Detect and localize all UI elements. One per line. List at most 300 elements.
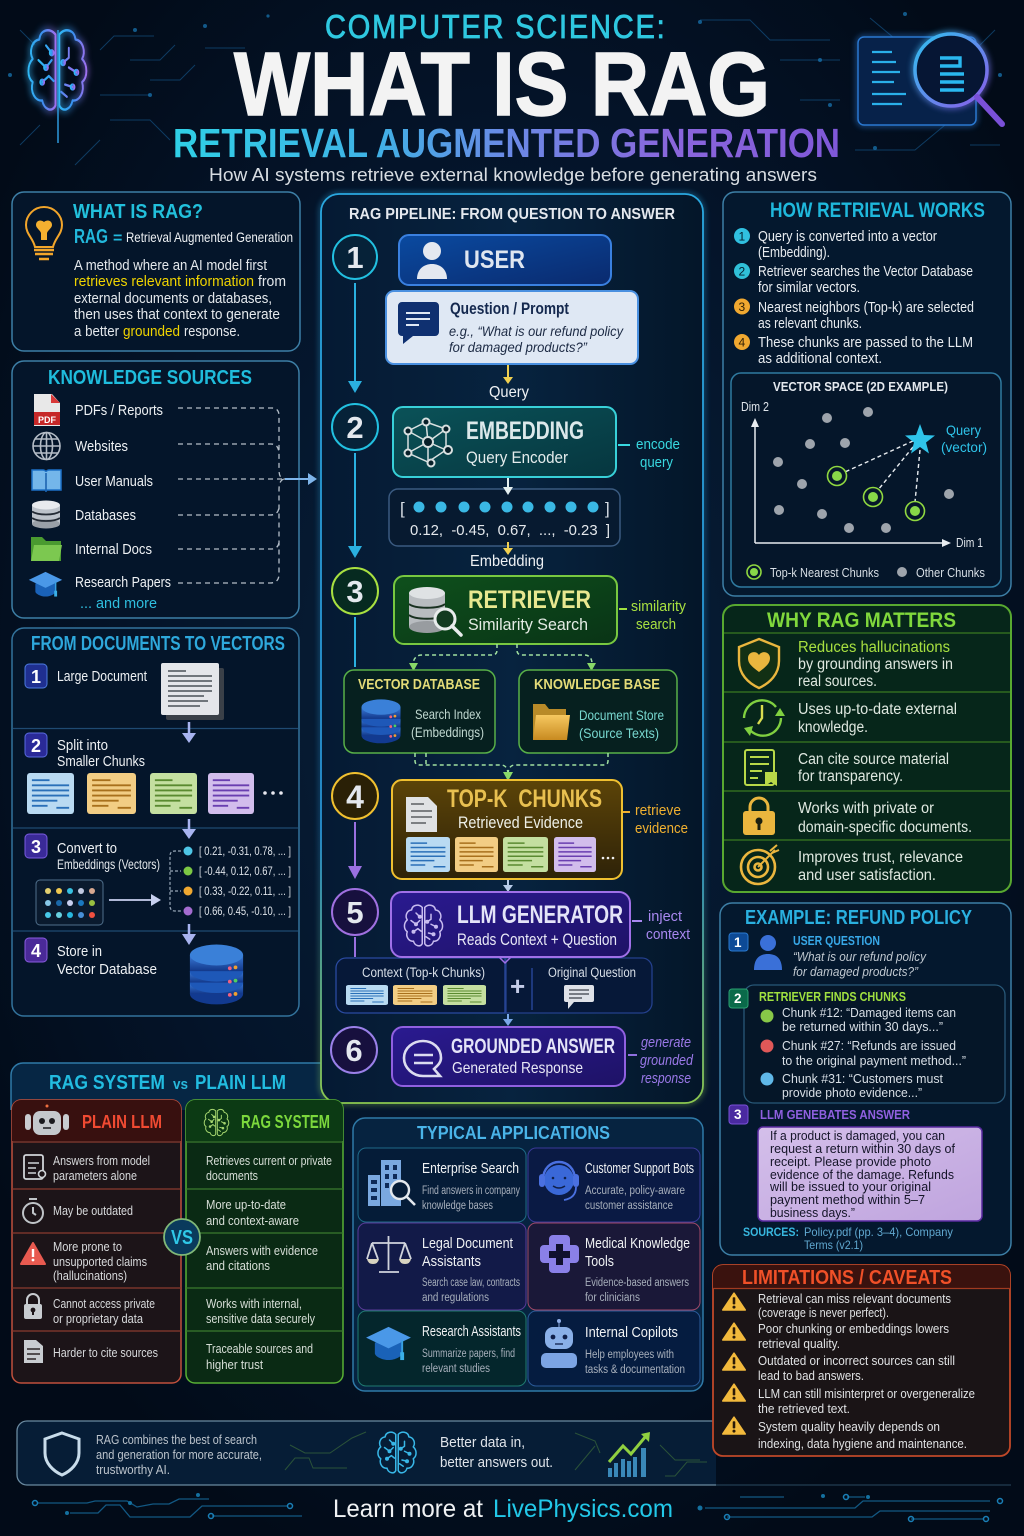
caveats text: LLM can still misinterpret or overgeneralize: [758, 1386, 975, 1401]
rag system points: and citations: [206, 1259, 270, 1273]
footer: learn more: Learn more at: [333, 1495, 483, 1523]
step 3: llm generates answer: 3: [734, 1107, 742, 1122]
panel: what is rag: [12, 192, 300, 351]
icon: clock refresh: [744, 700, 785, 736]
panel: typical applications: [353, 1118, 703, 1391]
icon: pdf: PDF: [38, 415, 56, 426]
answer box: business days.”: [770, 1205, 855, 1220]
answer box: request a return within 30 days of: [770, 1141, 955, 1156]
grounded answer box: [392, 1027, 625, 1086]
knowledge base box: KNOWLEDGE BASE: [534, 676, 660, 693]
description text: A method where an AI model first: [74, 258, 267, 274]
note: similarity search: similarity: [631, 598, 686, 615]
benefit text: Works with private or: [798, 800, 934, 817]
answer box: payment method within 5–7: [770, 1192, 925, 1207]
heading: WHAT IS RAG?: [73, 201, 203, 223]
panel: rag pipeline: [321, 194, 703, 1103]
chart: vector space: (vector): [941, 439, 987, 455]
icon: globe: [33, 432, 60, 460]
answer box: [758, 1127, 982, 1221]
benefit text: Can cite source material: [798, 751, 949, 768]
step list: [734, 228, 974, 367]
card: enterprise search: [358, 1148, 526, 1222]
chart: vector space: Query: [946, 422, 981, 438]
answer box: evidence of the damage. Refunds: [770, 1167, 954, 1182]
icon: pdf: [34, 394, 60, 426]
vector database box: (Embeddings): [411, 724, 484, 740]
bracket: [170, 851, 181, 911]
step 1: user question: USER QUESTION: [793, 933, 880, 948]
icon: graduation cap: [29, 572, 62, 597]
step list: These chunks are passed to the LLM: [758, 335, 973, 351]
retriever box: RETRIEVER: [468, 586, 591, 614]
description text: grounded: [123, 324, 180, 340]
benefit text: domain-specific documents.: [798, 819, 972, 836]
icon: target: [741, 845, 779, 884]
heading: [49, 1072, 286, 1094]
step 3: llm generates answer: LLM GENEBATES ANSWER: [760, 1107, 911, 1122]
icon: document search: [24, 1155, 46, 1179]
vector database box: VECTOR DATABASE: [358, 676, 480, 693]
definition line: =: [113, 230, 122, 247]
benefit text: Uses up-to-date external: [798, 701, 957, 718]
rag system points: Traceable sources and: [206, 1342, 313, 1356]
rag system points: sensitive data securely: [206, 1312, 316, 1326]
question box: [386, 291, 638, 364]
card: medical knowledge tools: for clinicians: [585, 1292, 640, 1304]
chart: vector space: Other Chunks: [916, 566, 985, 580]
icon: book: [32, 470, 61, 492]
answer box: receipt. Please provide photo: [770, 1154, 931, 1169]
label: embedding: [470, 542, 544, 570]
vector values: [ 0.66, 0.45, -0.10, ... ]: [199, 904, 291, 918]
step circle 3: [332, 568, 378, 614]
step 3: Embeddings (Vectors): [57, 857, 160, 872]
note: encode query: [618, 436, 680, 471]
chart: vector space: VECTOR SPACE (2D EXAMPLE): [773, 379, 948, 394]
badge: vs: [164, 1219, 200, 1255]
step 2: retriever finds chunks: be returned within 30 days...”: [782, 1020, 943, 1034]
step list: 3: [738, 300, 746, 314]
plain llm points: Answers from model: [53, 1154, 150, 1168]
heading: RAG SYSTEM: [241, 1112, 330, 1132]
caveats text: retrieval quality.: [758, 1336, 840, 1351]
original question box: [506, 958, 652, 1013]
step 1: [25, 664, 147, 688]
caveats text: lead to bad answers.: [758, 1368, 864, 1383]
embedding vector: ]: [605, 499, 610, 518]
note: generate grounded response: grounded: [640, 1053, 694, 1069]
step circle 4: [332, 773, 378, 819]
benefit text: Improves trust, relevance: [798, 849, 963, 866]
icon: stopwatch: [23, 1199, 43, 1223]
note: generate grounded response: response: [641, 1071, 691, 1087]
step 4: 4: [31, 941, 41, 961]
vector database box: [344, 670, 495, 753]
arrow: query: [489, 365, 529, 401]
step list: Query is converted into a vector: [758, 229, 937, 245]
heading: HOW RETRIEVAL WORKS: [770, 199, 985, 222]
description text: response.: [184, 324, 240, 340]
plain llm points: More prone to: [53, 1240, 122, 1254]
heading: EXAMPLE: REFUND POLICY: [745, 907, 973, 929]
embedding vector: [389, 489, 620, 546]
summary text: RAG combines the best of search: [96, 1433, 257, 1447]
step list: Nearest neighbors (Top-k) are selected: [758, 300, 974, 316]
caveats text: Outdated or incorrect sources can still: [758, 1353, 955, 1368]
icon: document with magnifier: [858, 34, 1002, 125]
rag system points: Answers with evidence: [206, 1244, 318, 1258]
definition line: Retrieval Augmented Generation: [126, 229, 293, 245]
step 2: retriever finds chunks: provide photo evidence...”: [782, 1086, 922, 1100]
step list: 4: [738, 336, 746, 350]
summary text: and generation for more accurate,: [96, 1448, 262, 1462]
step 1: user question: [729, 933, 927, 979]
caveats text: indexing, data hygiene and maintenance.: [758, 1436, 967, 1451]
card: enterprise search: Find answers in company: [422, 1185, 520, 1197]
vector values: [ 0.21, -0.31, 0.78, ... ]: [199, 844, 291, 858]
benefit text: real sources.: [798, 673, 877, 690]
card: legal document assistants: Search case law, contracts: [422, 1277, 520, 1289]
step 2: retriever finds chunks: 2: [734, 991, 742, 1006]
title: what is rag: WHAT IS RAG: [234, 35, 770, 135]
step list: Retriever searches the Vector Database: [758, 264, 973, 280]
arrow 1 to 2: [348, 283, 362, 393]
heading: PLAIN LLM: [195, 1072, 286, 1094]
step 4: Vector Database: [57, 962, 157, 978]
rag system points: More up-to-date: [206, 1198, 286, 1212]
card: medical knowledge tools: Evidence-based answers: [585, 1277, 689, 1289]
knowledge base box: [519, 670, 677, 753]
step circle 5: [332, 889, 378, 935]
rag system points: [206, 1154, 332, 1372]
summary text: [96, 1433, 262, 1477]
original question box: +: [510, 971, 525, 1001]
description text: external documents or databases,: [74, 291, 272, 307]
description text: [74, 258, 286, 340]
embedding box: EMBEDDING: [466, 417, 584, 445]
source labels: ... and more: [80, 595, 157, 612]
plain llm points: Cannot access private: [53, 1297, 155, 1311]
note: similarity search: search: [636, 616, 676, 633]
heading: LIMITATIONS / CAVEATS: [742, 1267, 952, 1289]
step 1: 1: [31, 667, 41, 687]
step 2: retriever finds chunks: [729, 985, 1005, 1103]
note: inject context: inject: [648, 908, 683, 925]
card: enterprise search: Enterprise Search: [422, 1160, 519, 1177]
step list: as additional context.: [758, 351, 882, 367]
step 3: Convert to: [57, 841, 117, 857]
caveats text: [758, 1291, 975, 1451]
icon: document: [24, 1340, 43, 1363]
step circle 3: 3: [346, 574, 364, 609]
step circle 2: 2: [346, 410, 364, 445]
heading: RAG SYSTEM: [49, 1072, 165, 1094]
panel: example refund policy: [720, 903, 1011, 1255]
note: inject context: [632, 908, 691, 943]
panel: plain llm: [12, 1100, 181, 1383]
benefit text: for transparency.: [798, 768, 903, 785]
step 2: 2: [31, 736, 41, 756]
vector values: [184, 844, 291, 918]
retriever box: [394, 576, 617, 644]
caveats text: the retrieved text.: [758, 1401, 850, 1416]
source labels: PDFs / Reports: [75, 402, 163, 419]
rag system points: and context-aware: [206, 1214, 299, 1228]
step 4: [25, 938, 157, 978]
card: research assistants: Research Assistants: [422, 1323, 521, 1340]
panel: limitations: [713, 1265, 1010, 1456]
step 2: Split into: [57, 738, 108, 754]
arrow: to answer: [503, 1014, 513, 1026]
arrow 4 to 5: [348, 822, 362, 879]
description text: from: [258, 274, 286, 290]
dashed connectors: [178, 408, 285, 583]
question box: e.g., “What is our refund policy: [449, 323, 624, 339]
grounded answer box: Generated Response: [452, 1060, 583, 1077]
rag system points: Retrieves current or private: [206, 1154, 332, 1168]
source labels: Databases: [75, 507, 136, 524]
heading: TYPICAL APPLICATIONS: [417, 1123, 610, 1143]
source labels: [75, 402, 171, 612]
label: embedding: Embedding: [470, 553, 544, 570]
note: similarity search: [619, 598, 686, 633]
step list: (Embedding).: [758, 245, 830, 261]
step 3: llm generates answer: [729, 1105, 911, 1124]
chart: vector space: Top-k Nearest Chunks: [770, 566, 879, 580]
heading: KNOWLEDGE SOURCES: [48, 367, 252, 389]
summary text: trustworthy AI.: [96, 1463, 170, 1477]
plain llm points: May be outdated: [53, 1204, 133, 1218]
description text: retrieves relevant information: [74, 274, 254, 290]
benefit text: knowledge.: [798, 719, 868, 736]
heading: PLAIN LLM: [82, 1112, 162, 1132]
card: research assistants: [358, 1311, 526, 1386]
panel: knowledge sources: [12, 361, 299, 618]
plain llm points: Harder to cite sources: [53, 1346, 158, 1360]
plain llm points: unsupported claims: [53, 1255, 147, 1269]
embedding vector: 0.12, -0.45, 0.67, ..., -0.23 ]: [410, 522, 610, 539]
llm generator box: Reads Context + Question: [457, 931, 617, 949]
arrow: to vector: [503, 478, 513, 495]
chart: vector space: [731, 373, 1001, 587]
rag system points: higher trust: [206, 1358, 263, 1372]
top-k chunks box: [392, 780, 622, 879]
arrow: sources to pipeline: [285, 473, 317, 485]
dashed split: [413, 644, 592, 664]
embedding box: [393, 407, 616, 477]
card: legal document assistants: [358, 1223, 526, 1310]
plain llm points: parameters alone: [53, 1169, 137, 1183]
step 1: Large Document: [57, 669, 147, 685]
tagline: better answers out.: [440, 1454, 553, 1471]
arrow: [182, 819, 196, 839]
icon: light bulb: [26, 207, 62, 259]
card: customer support bots: [528, 1148, 700, 1222]
icon: robot: [25, 1104, 69, 1135]
step 3: [25, 834, 160, 872]
tagline: How AI systems retrieve external knowledge before generating answers: [209, 165, 817, 185]
icon: growth chart: [608, 1432, 650, 1477]
note: inject context: context: [646, 926, 691, 943]
card: internal copilots: Help employees with: [585, 1349, 674, 1361]
top-k chunks box: Retrieved Evidence: [458, 814, 583, 832]
note: encode query: encode: [636, 436, 680, 453]
step 2: retriever finds chunks: RETRIEVER FINDS CHUNKS: [759, 989, 906, 1004]
context box: Context (Top-k Chunks): [362, 965, 485, 980]
icon: database: [32, 500, 60, 528]
panel: bottom banner: [17, 1421, 716, 1485]
chunks row: [27, 773, 283, 814]
sources: SOURCES:: [743, 1225, 799, 1239]
icon: glowing brain: [28, 30, 86, 143]
question box: for damaged products?”: [449, 339, 588, 355]
grounded answer box: GROUNDED ANSWER: [451, 1035, 615, 1058]
arrow 2 to 3: [348, 453, 362, 558]
caveats text: (coverage is never perfect).: [758, 1305, 889, 1320]
answer box: If a product is damaged, you can: [770, 1128, 945, 1143]
card: customer support bots: Customer Support Bots: [585, 1160, 694, 1177]
card: research assistants: relevant studies: [422, 1363, 490, 1375]
step list: 1: [738, 230, 746, 244]
step 1: user question: for damaged products?”: [793, 965, 919, 979]
step list: 2: [738, 264, 746, 278]
sources: Policy.pdf (pp. 3–4), Company: [804, 1225, 953, 1239]
step circle 2: [332, 404, 378, 450]
knowledge base box: (Source Texts): [579, 725, 659, 741]
arrow: [109, 894, 161, 906]
retriever box: Similarity Search: [468, 615, 588, 634]
card: medical knowledge tools: [528, 1223, 700, 1310]
embedding grid: [36, 880, 103, 925]
card: legal document assistants: and regulations: [422, 1292, 489, 1304]
definition line: [74, 226, 293, 248]
heading: vs: [173, 1076, 188, 1093]
plain llm points: [53, 1154, 158, 1360]
step 2: retriever finds chunks: to the original payment method...”: [782, 1054, 966, 1068]
note: retrieve evidence: evidence: [635, 820, 688, 837]
heading: FROM DOCUMENTS TO VECTORS: [31, 633, 285, 655]
card: medical knowledge tools: Medical Knowledge: [585, 1235, 690, 1252]
card: internal copilots: tasks & documentation: [585, 1364, 685, 1376]
benefit text: Reduces hallucinations: [798, 639, 950, 656]
icon: brain: [204, 1109, 229, 1136]
panel: rag system: [186, 1100, 343, 1383]
panel: how retrieval works: [723, 192, 1011, 596]
icon: shield: [45, 1433, 79, 1475]
source labels: User Manuals: [75, 473, 153, 490]
tagline: Better data in,: [440, 1434, 525, 1451]
answer box: will be issued to your original: [769, 1179, 931, 1194]
note: retrieve evidence: [623, 802, 688, 837]
card: research assistants: Summarize papers, find: [422, 1348, 515, 1360]
chart: vector space: Dim 1: [956, 536, 983, 550]
benefit text: [798, 639, 972, 884]
user box: USER: [464, 246, 525, 274]
note: generate grounded response: [628, 1035, 694, 1087]
step 1: user question: 1: [734, 935, 742, 950]
caveats text: Retrieval can miss relevant documents: [758, 1291, 951, 1306]
caveats text: System quality heavily depends on: [758, 1419, 940, 1434]
step circle 6: 6: [345, 1033, 363, 1068]
step circle 1: [333, 235, 377, 279]
source labels: Websites: [75, 438, 128, 455]
icon: brain: [378, 1432, 416, 1473]
original question box: Original Question: [548, 965, 636, 980]
icon: large document: [161, 663, 224, 720]
definition line: RAG: [74, 226, 108, 248]
step circle 6: [331, 1027, 377, 1073]
card: internal copilots: [528, 1311, 700, 1386]
tagline: [440, 1434, 553, 1471]
source labels: Research Papers: [75, 574, 171, 591]
step 3: 3: [31, 837, 41, 857]
description text: then uses that context to generate: [74, 307, 280, 323]
badge: vs: VS: [171, 1227, 193, 1249]
step 2: Smaller Chunks: [57, 754, 145, 770]
card: customer support bots: customer assistance: [585, 1200, 673, 1212]
icon: warning: [21, 1243, 45, 1264]
card: internal copilots: Internal Copilots: [585, 1324, 678, 1341]
step circle 5: 5: [346, 895, 364, 930]
embedding box: Query Encoder: [466, 448, 568, 467]
heading: RAG PIPELINE: FROM QUESTION TO ANSWER: [349, 206, 675, 223]
description text: a better: [74, 324, 119, 340]
vector values: [ 0.33, -0.22, 0.11, ... ]: [199, 884, 291, 898]
step 2: [25, 733, 145, 770]
plain llm points: (hallucinations): [53, 1269, 127, 1283]
caveats text: Poor chunking or embeddings lowers: [758, 1321, 949, 1336]
dashed merge: [415, 753, 608, 773]
note: retrieve evidence: retrieve: [635, 802, 681, 819]
step 2: retriever finds chunks: Chunk #31: “Customers must: [782, 1072, 944, 1086]
footer: learn more: [333, 1495, 673, 1523]
llm generator box: [391, 892, 630, 963]
warning icons: [723, 1293, 745, 1434]
source labels: Internal Docs: [75, 541, 152, 558]
step 2: retriever finds chunks: Chunk #27: “Refunds are issued: [782, 1039, 956, 1053]
user box: [399, 235, 611, 285]
step list: for similar vectors.: [758, 280, 860, 296]
plain llm points: or proprietary data: [53, 1312, 143, 1326]
question box: Question / Prompt: [450, 300, 569, 318]
llm generator box: LLM GENERATOR: [457, 901, 623, 929]
card: legal document assistants: Assistants: [422, 1253, 481, 1270]
vector values: [ -0.44, 0.12, 0.67, ... ]: [199, 864, 291, 878]
embedding vector: [: [400, 499, 405, 518]
top-k chunks box: TOP-K CHUNKS: [447, 785, 602, 813]
panel: rag vs plain llm header: [11, 1063, 325, 1110]
arrow: [182, 924, 196, 945]
arrow: to llm: [503, 880, 513, 892]
icon: lock: [24, 1294, 42, 1319]
icon: citation document: [745, 750, 777, 786]
subtitle: retrieval augmented generation: RETRIEVAL AUGMENTED GENERATION: [173, 120, 840, 166]
icon: vector database: [190, 945, 243, 1004]
sources: [743, 1225, 953, 1252]
heading: WHY RAG MATTERS: [767, 609, 956, 632]
icon: shield: [739, 639, 779, 688]
sources: Terms (v2.1): [804, 1238, 863, 1252]
vector database box: Search Index: [415, 706, 481, 722]
footer: learn more: LivePhysics.com: [493, 1495, 673, 1523]
arrow: query: Query: [489, 384, 529, 401]
note: encode query: query: [640, 454, 673, 471]
card: customer support bots: Accurate, policy-aware: [585, 1185, 685, 1197]
benefit text: by grounding answers in: [798, 656, 953, 673]
rag system points: Works with internal,: [206, 1297, 302, 1311]
step circle 4: 4: [346, 779, 364, 815]
